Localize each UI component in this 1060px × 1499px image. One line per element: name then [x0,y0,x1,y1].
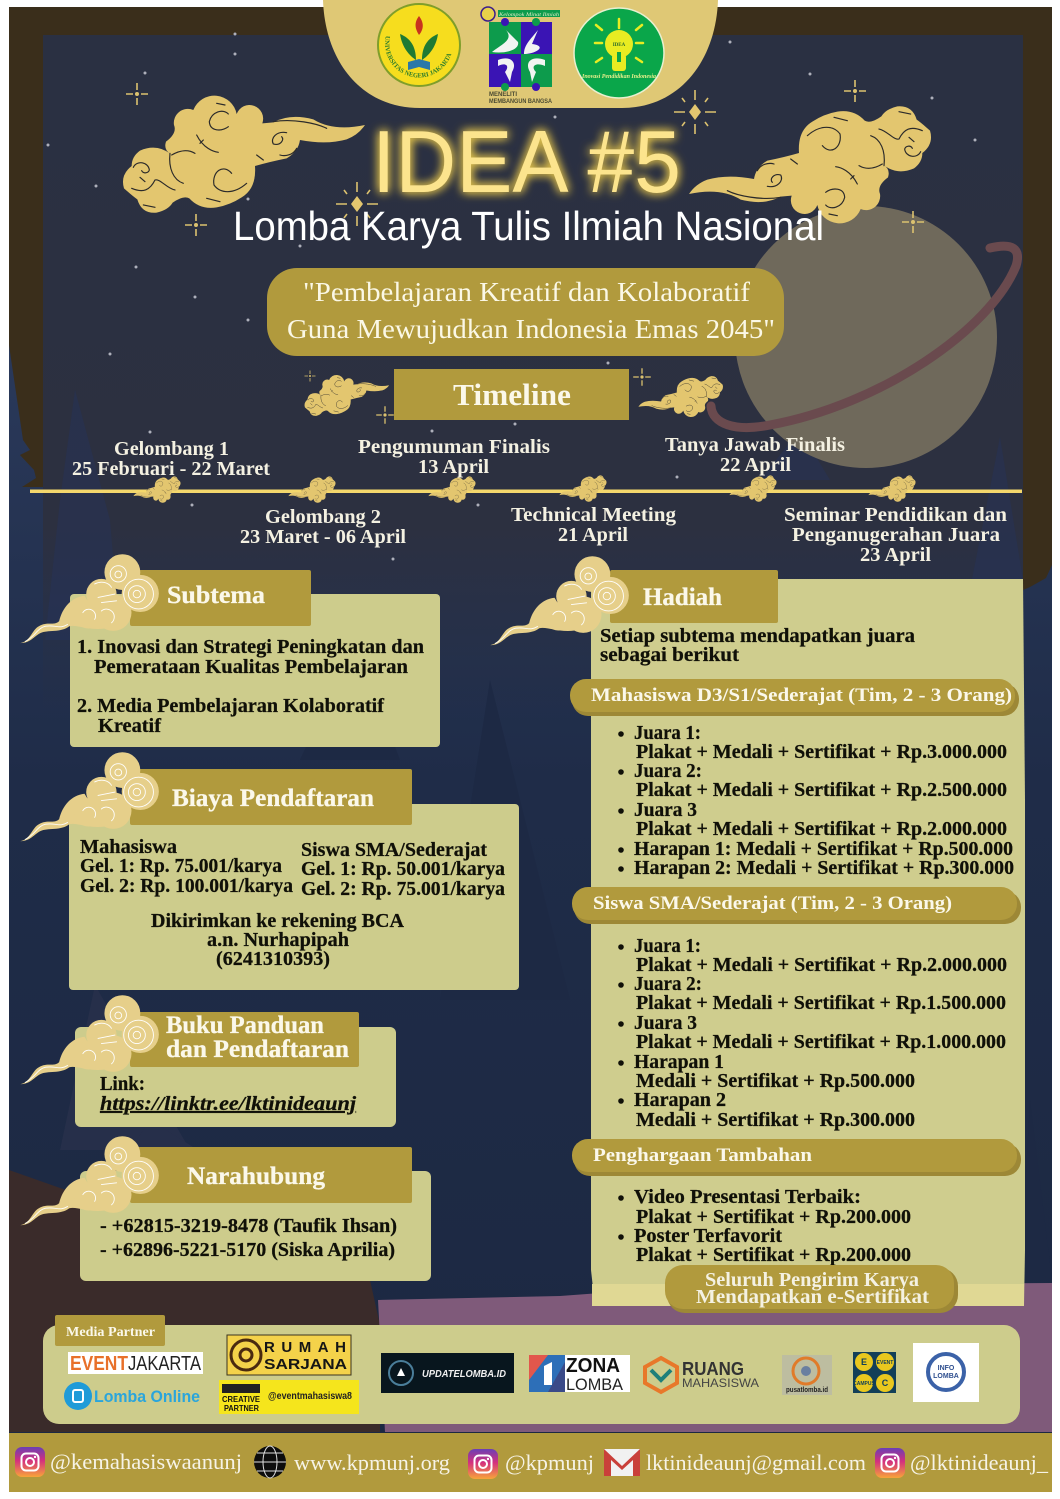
prize list: mahasiswa: Juara 3 [634,800,697,821]
prize list: mahasiswa: Plakat + Medali + Sertifikat + Rp.3.000.000 [636,742,1007,763]
theme pill: Guna Mewujudkan Indonesia Emas 2045" [287,314,775,344]
prize list: siswa: Plakat + Medali + Sertifikat + Rp.1.500.000 [636,993,1006,1014]
category bar: mahasiswa: Mahasiswa D3/S1/Sederajat (Tim, 2 - 3 Orang) [591,685,1012,706]
link: https://linktr.ee/lktinideaunj [100,1094,357,1115]
logo: Rumah Sarjana: SARJANA [264,1356,347,1373]
link [100,1074,357,1115]
panel: media partner [43,1315,1020,1424]
event: Pengumuman Finalis [358,437,550,478]
e-certificate pill: Mendapatkan e-Sertifikat [696,1287,930,1308]
panel: subtema [20,554,440,747]
prize list: mahasiswa: Harapan 2: Medali + Sertifikat + Rp.300.000 [634,858,1014,879]
event: Gelombang 1 [72,439,271,480]
fee: mahasiswa [80,837,293,897]
link: Link: [100,1074,145,1095]
fee: mahasiswa: Gel. 1: Rp. 75.001/karya [80,856,282,877]
fee: mahasiswa: Gel. 2: Rp. 100.001/karya [80,876,293,897]
prize list: mahasiswa: Juara 2: [634,761,702,782]
logo: Event Campus: CAMPUS [853,1381,875,1387]
logo: Event Jakarta [68,1352,203,1375]
panel: hadiah [490,556,1025,1313]
panel: biaya pendaftaran [20,752,519,990]
logo: Kelompok Minat Ilmiah: MENELITI [489,92,517,98]
category bar: penghargaan [572,1139,1021,1176]
footer contact bar: @kemahasiswaanunj [50,1449,242,1474]
prize list: tambahan: Plakat + Sertifikat + Rp.200.000 [636,1245,911,1266]
logo: Creative Partner: CREATIVE [222,1395,261,1404]
icon: instagram [468,1449,498,1479]
category bar: siswa: Siswa SMA/Sederajat (Tim, 2 - 3 Orang) [593,893,952,914]
icon: mail [604,1449,640,1476]
logo: Ruang Mahasiswa: MAHASISWA [682,1376,759,1390]
event: Seminar Pendidikan: Seminar Pendidikan dan [784,505,1007,526]
logo: Inovasi Pendidikan Indonesia: Inovasi Pendidikan Indonesia [581,74,656,80]
event: Gelombang 2: 23 Maret - 06 April [240,527,407,548]
fee: siswa: Gel. 2: Rp. 75.001/karya [301,879,505,900]
background stars [46,32,976,560]
contacts [100,1216,397,1261]
event: Gelombang 2 [240,507,407,548]
logo: Universitas Negeri Jakarta [377,3,461,87]
prize list: mahasiswa: Harapan 1: Medali + Sertifikat + Rp.500.000 [634,839,1013,860]
decorative large clouds [123,96,931,223]
logo: Kelompok Minat Ilmiah: MEMBANGUN BANGSA [489,99,553,105]
event: Technical Meeting: Technical Meeting [511,505,676,526]
prize list: mahasiswa: Plakat + Medali + Sertifikat + Rp.2.500.000 [636,780,1007,801]
subtema list: 2. Media Pembelajaran Kolaboratif [77,696,385,717]
icon: cloud [20,995,159,1084]
footer contact bar: www.kpmunj.org [294,1450,450,1475]
event: Pengumuman Finalis: 13 April [418,457,490,478]
event: Seminar Pendidikan: Penganugerahan Juara [792,525,1000,546]
icon: cloud [20,1136,159,1225]
event: Seminar Pendidikan: 23 April [860,545,932,566]
sparkle decorations [126,80,924,424]
subtema list [77,637,424,737]
prize list: mahasiswa: Plakat + Medali + Sertifikat + Rp.2.000.000 [636,819,1007,840]
logo: Event Jakarta: JAKARTA [128,1353,202,1375]
logo: Zona Lomba: ZONA [566,1355,620,1377]
bank account [151,911,404,970]
contacts: - +62815-3219-8478 (Taufik Ihsan) [100,1216,397,1237]
logo: Event Campus [853,1352,896,1393]
logo: Event Jakarta: EVENT [70,1353,128,1375]
prize list: siswa: Plakat + Medali + Sertifikat + Rp.1.000.000 [636,1032,1006,1053]
subtema list: Pemerataan Kualitas Pembelajaran [94,657,408,678]
media partner label: Media Partner [66,1325,155,1340]
category bar: siswa [572,887,1021,924]
logo: Info Lomba: LOMBA [933,1373,959,1380]
contacts: - +62896-5221-5170 (Siska Aprilia) [100,1240,395,1261]
icon: instagram [15,1447,45,1477]
heading: Buku Panduan [166,1012,324,1039]
event: Tanya Jawab Finalis: Tanya Jawab Finalis [665,435,845,456]
logo: Creative Partner: PARTNER [224,1404,259,1413]
logo: Updatelomba [381,1353,514,1393]
logo: Ruang Mahasiswa [645,1358,759,1392]
prize list: tambahan: Video Presentasi Terbaik: [634,1187,861,1208]
bank account: Dikirimkan ke rekening BCA [151,911,404,932]
event: Tanya Jawab Finalis [665,435,845,476]
prize list: siswa: Medali + Sertifikat + Rp.500.000 [636,1071,915,1092]
heading: dan Pendaftaran [166,1036,349,1063]
logo: Rumah Sarjana: RUMAH [264,1339,346,1356]
prize list: siswa: Juara 1: [634,936,701,957]
icon: cloud [20,752,159,841]
prize list: tambahan: Plakat + Sertifikat + Rp.200.000 [636,1207,911,1228]
prize list: siswa: Juara 3 [634,1013,697,1034]
planet with ring [711,206,1018,468]
event: Technical Meeting [511,505,676,546]
title: IDEA #5 [372,112,681,211]
heading: Subtema [167,582,266,609]
logo: Kelompok Minat Ilmiah [481,7,560,105]
event: Tanya Jawab Finalis: 22 April [720,455,792,476]
intro text [600,626,915,666]
icon: timeline right cloud [638,376,723,417]
icon: globe [254,1446,286,1478]
panel: narahubung [20,1136,431,1281]
icon: left cloud [123,96,365,213]
logo: Event Campus: E [861,1357,867,1367]
heading: Hadiah [643,584,722,611]
timeline [30,435,1022,566]
event: Gelombang 1: 25 Februari - 22 Maret [72,459,271,480]
icon: cloud [20,554,159,643]
prize list: tambahan: Poster Terfavorit [634,1226,783,1247]
fee: siswa: Siswa SMA/Sederajat [301,840,488,861]
fee: siswa: Gel. 1: Rp. 50.001/karya [301,859,505,880]
logo: Pusatlomba: pusatlomba.id [786,1387,828,1394]
intro text: sebagai berikut [600,645,740,666]
footer contact bar [9,1433,1052,1492]
e-certificate pill: Seluruh Pengirim Karya [705,1270,919,1291]
event: Pengumuman Finalis: Pengumuman Finalis [358,437,550,458]
logo: Event Campus: C [882,1378,889,1388]
event: Seminar Pendidikan [784,505,1007,566]
logo header cap [323,0,718,108]
prize list: siswa: Harapan 1 [634,1052,724,1073]
subtitle: Lomba Karya Tulis Ilmiah Nasional [233,203,824,249]
category bar: mahasiswa [570,679,1019,716]
event: Technical Meeting: 21 April [558,525,629,546]
prize list: tambahan [618,1187,911,1266]
panel: buku panduan [20,995,396,1127]
logo: Ruang Mahasiswa: RUANG [682,1359,744,1379]
prize list: siswa: Medali + Sertifikat + Rp.300.000 [636,1110,915,1131]
icon: timeline left cloud [305,375,389,416]
theme pill [267,268,784,356]
logo: Lomba Online [64,1382,200,1410]
logo: Info Lomba: INFO [938,1365,955,1372]
logo: Creative Partner [219,1380,359,1414]
logo: Zona Lomba [529,1355,630,1394]
heading: Narahubung [187,1163,326,1190]
timeline heading [305,369,723,420]
logo: Zona Lomba: LOMBA [566,1375,624,1394]
prize list: mahasiswa: Juara 1: [634,723,701,744]
logo: Updatelomba: UPDATELOMBA.ID [422,1369,506,1380]
prize list: siswa: Juara 2: [634,974,702,995]
theme pill: "Pembelajaran Kreatif dan Kolaboratif [303,277,750,307]
logo: Kelompok Minat Ilmiah: Kelompok Minat Ilmiah [498,12,559,18]
category bar: penghargaan: Penghargaan Tambahan [593,1145,812,1166]
logo: Info Lomba [913,1343,979,1402]
heading [166,1012,349,1063]
logo: Event Campus: EVENT [877,1360,893,1366]
logo: Rumah Sarjana [227,1335,351,1375]
logo: Creative Partner: @eventmahasiswa8 [268,1391,352,1402]
fee: mahasiswa: Mahasiswa [80,837,177,858]
prize list: mahasiswa [618,723,1014,879]
e-certificate pill [665,1265,958,1313]
subtema list: Kreatif [98,716,162,737]
icon: instagram [875,1448,905,1478]
intro text: Setiap subtema mendapatkan juara [600,626,915,647]
event: Gelombang 1: Gelombang 1 [114,439,229,460]
logo: Lomba Online: Lomba Online [94,1387,200,1406]
footer contact bar: lktinideaunj@gmail.com [646,1450,866,1475]
heading: Biaya Pendaftaran [172,785,374,812]
prize list: siswa [618,936,1007,1131]
timeline heading: Timeline [453,377,571,412]
prize list: siswa: Harapan 2 [634,1090,726,1111]
footer contact bar: @lktinideaunj_ [910,1450,1049,1475]
fee: siswa [301,840,505,900]
logo: Inovasi Pendidikan Indonesia [574,8,664,98]
icon: right cloud [689,106,931,223]
logo: Inovasi Pendidikan Indonesia: IDEA [613,43,626,48]
logo: Pusatlomba [782,1355,832,1395]
icon: cloud [490,556,629,645]
footer contact bar: @kpmunj [505,1450,594,1475]
prize list: siswa: Plakat + Medali + Sertifikat + Rp.2.000.000 [636,955,1007,976]
event: Gelombang 2: Gelombang 2 [265,507,381,528]
bank account: a.n. Nurhapipah [207,930,349,951]
logo: Universitas Negeri Jakarta: UNIVERSITAS NEGERI JAKARTA [385,36,452,78]
subtema list: 1. Inovasi dan Strategi Peningkatan dan [77,637,424,658]
bank account: (6241310393) [216,949,330,970]
